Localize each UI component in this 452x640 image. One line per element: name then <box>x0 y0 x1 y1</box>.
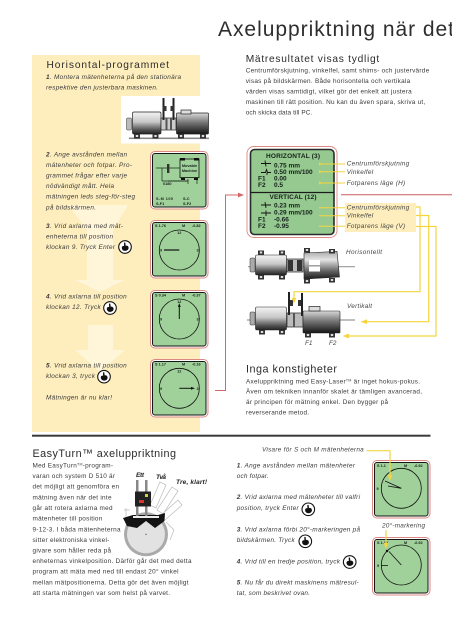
text: vertical values: 0.23 mm <box>274 203 300 210</box>
screen: EasyTurn clock with pointers <box>372 460 430 518</box>
labels: horizontal value names: Vinkelfel <box>347 169 374 176</box>
text block: Inga konstigheter: Axeluppriktning med Easy-Laser <box>246 378 346 385</box>
screen: clock position 9: 9 <box>160 248 162 252</box>
screen: EasyTurn clock with pointers: M <box>404 464 407 468</box>
text: vertical values: 0.29 mm/100 <box>274 209 313 216</box>
text block: EasyTurn body: program att mäta med ned till endast 20° vinkel <box>32 568 178 576</box>
text block: EasyTurn body <box>32 462 192 597</box>
text block: step 1 <box>46 73 181 92</box>
label: Vertikalt: Vertikalt <box>347 303 372 310</box>
icon: enter button EasyTurn step 2 <box>302 503 315 516</box>
screen: clock position 12: 9 <box>160 318 162 322</box>
text: horizontal values: 0.5 <box>274 182 283 189</box>
heading: Horisontal-programmet: Horisontal-programmet <box>46 60 169 71</box>
text block: Inga konstigheter: Även om tekniken innanför skalet är tämligen avancerad, <box>246 388 422 396</box>
text block: Mätresultatet: visas på bildskärmen. Både horisontella och vertikala <box>246 77 411 85</box>
text: horizontal values <box>258 160 313 189</box>
screen: clock position 3: M <box>182 362 185 366</box>
divider: dark rule <box>32 435 430 437</box>
labels: horizontal value names <box>347 161 410 187</box>
screen: EasyTurn clock with pointers: 9 <box>376 487 379 491</box>
screen: clock position 9: -0.82 <box>192 224 201 228</box>
arrow: yellow pointer to 20 degree mark <box>384 530 388 549</box>
label: Tre, klart!: Tre, klart! <box>176 479 208 486</box>
screen: EasyTurn clock with pointers: -6.92 <box>414 464 423 468</box>
screen: EasyTurn clock with 20 degree mark <box>372 538 430 595</box>
text: horizontal values: F1 <box>258 176 266 183</box>
text block: EasyTurn body: det möjligt att genomföra en <box>32 484 119 491</box>
text block: EasyTurn body: enheternas vinkelposition. Därför går det med detta <box>32 557 192 565</box>
text block: step 4: 4. Vrid axlarna till position <box>45 293 127 300</box>
heading: VERTICAL (12): VERTICAL (12) <box>270 194 316 201</box>
text block: step 5: klockan 3, tryck <box>46 373 96 380</box>
text block: EasyTurn body: TM <box>77 462 83 466</box>
callout: vertical value names with cream box: Vinkelfel <box>347 212 374 220</box>
screen: clock position 9: 12 <box>177 231 181 235</box>
text block: EasyTurn steps: position, tryck Enter <box>236 505 300 512</box>
text block: EasyTurn body: mellan mätpositionerna. Detta gör det även möjligt <box>32 579 189 586</box>
screen: EasyTurn clock with 20 degree mark: -6.92 <box>414 541 423 545</box>
title: Axeluppriktning när det <box>218 18 452 41</box>
arrow: yellow pointer to S and M hands <box>367 451 392 481</box>
label: Horisontellt: Horisontellt <box>346 249 382 256</box>
text: vertical values: F1 <box>258 216 266 223</box>
divider: red line right of screen <box>341 194 452 196</box>
panel: Horisontal-programmet cream background <box>32 55 200 432</box>
callout: vertical value names with cream box: Centrumförskjutning <box>347 204 410 212</box>
illustration: machine, horizontal view <box>248 248 355 284</box>
screen: clock position 3 <box>150 360 208 417</box>
screen: clock position 12 <box>150 290 208 348</box>
text block: EasyTurn body: sitter elektroniska vinkel- <box>32 537 109 544</box>
screen: Movable Machine distances <box>150 152 208 209</box>
label: F2: F2 <box>329 340 337 347</box>
text block: step 5: Mätningen är nu klar! <box>46 394 112 401</box>
icon: enter button step 4 <box>104 302 116 314</box>
screen: clock position 3: 9 <box>160 387 162 391</box>
icon: enter button step 3 <box>119 241 131 253</box>
text block: step 2: 2. Ange avstånden mellan <box>45 150 127 158</box>
text block: step 3: 3. Vrid axlarna med mät- <box>46 223 123 230</box>
text block: step 2: nödvändigt mått. Hela <box>46 182 114 190</box>
screen: EasyTurn clock with 20 degree mark: M <box>404 541 407 545</box>
screen: EasyTurn clock with 20 degree mark: 9 <box>377 564 379 568</box>
screen: clock position 3: 12 <box>177 370 181 374</box>
text block: step 1: 1. Montera mätenheterna på den stationära <box>46 73 181 81</box>
text block: EasyTurn body: mätning även när det inte <box>32 494 112 501</box>
screen: clock position 3: 3 <box>196 387 199 391</box>
text block: step 2: mätenheter och fotpar. Pro- <box>46 162 132 169</box>
text block: Inga konstigheter: är principen för mätning enkel. Den bygger på <box>246 398 388 406</box>
screen: Movable Machine distances: 0180 <box>163 182 171 186</box>
text block: step 2 <box>45 150 135 212</box>
text block: step 2: mätningen leds steg-för-steg <box>46 194 135 200</box>
screen: clock position 12: S 0.34 <box>155 294 167 298</box>
text block: EasyTurn body: -program- <box>83 462 113 469</box>
text block: step 4: klockan 12. Tryck <box>46 304 101 311</box>
screen: Movable Machine distances: S-F2 <box>183 202 191 206</box>
screen: clock position 9: M <box>182 224 185 228</box>
label: Två: Två <box>156 473 166 481</box>
text block: step 1: respektive den justerbara maskinen. <box>46 84 158 92</box>
screen: clock position 3: S 1.17 <box>155 362 166 366</box>
text: horizontal values: 0.00 <box>274 176 287 183</box>
screen: EasyTurn clock with pointers: S 1.1 <box>377 464 386 468</box>
text: vertical values: F2 <box>258 223 266 230</box>
callout: vertical value names with cream box <box>319 203 416 232</box>
text: horizontal values: F2 <box>258 182 266 189</box>
text block: step 2: på bildskärmen. <box>45 204 96 212</box>
text block: step 3: klockan 9. Tryck Enter <box>46 244 116 251</box>
label: Ett: Ett <box>136 472 145 479</box>
callout: vertical value names with cream box: Fotparens läge (V) <box>347 223 405 230</box>
heading: EasyTurn axeluppriktning: EasyTurn™ axeluppriktning <box>32 448 176 460</box>
screen: clock position 12: 12 <box>177 300 181 304</box>
text block: EasyTurn steps: 2. Vrid axlarna med mätenheter till valfri <box>236 494 361 501</box>
text block: step 3 <box>46 223 123 251</box>
text: vertical values <box>258 202 313 230</box>
illustration: machine, vertical view with yellow pointers <box>247 292 355 338</box>
text block: Mätresultatet: maskinen till rätt position. Nu kan du även spara, skriva ut, <box>246 99 425 106</box>
callout: yellow leader lines for horizontal values <box>319 162 345 185</box>
text block: Mätresultatet: och skicka data till PC. <box>246 110 312 116</box>
text block: EasyTurn steps <box>236 461 361 597</box>
text block: Mätresultatet: värden visas samtidigt, vilket gör det enkelt att justera <box>246 88 412 96</box>
arrow: yellow leaders to vertical machine <box>292 207 436 338</box>
text block: Inga konstigheter: är inget hokus-pokus. <box>352 378 420 385</box>
text block: EasyTurn body: varan och system D 510 är <box>32 473 116 480</box>
screen: clock position 12: M <box>182 294 185 298</box>
screen: Movable Machine distances: S-F1 <box>156 202 164 206</box>
text block: EasyTurn steps: 5. Nu får du direkt maskinens mätresul- <box>237 578 359 586</box>
text: vertical values: -0.66 <box>274 216 289 223</box>
text block: step 2: grammet frågar efter varje <box>46 172 127 180</box>
screen: clock position 9: S 1.76 <box>155 224 166 228</box>
text block: EasyTurn steps: 4. Vrid till en tredje position, tryck <box>236 558 341 565</box>
screen: Movable Machine distances: S-M 100 <box>156 197 173 201</box>
screen: clock position 12: 3 <box>196 318 199 322</box>
text: horizontal values: 0.75 mm <box>274 162 300 170</box>
text block: Mätresultatet: Centrumförskjutning, vinkelfel, samt shims- och justervärde <box>246 68 430 74</box>
text block: Inga konstigheter: reverserande metod. <box>246 410 309 416</box>
icon: enter button EasyTurn step 4 <box>343 556 356 568</box>
label: Visare för S och M: Visare för S och M mätenheterna <box>262 447 364 454</box>
screen: Movable Machine distances: Machine <box>182 169 197 173</box>
labels: horizontal value names: Fotparens läge (H) <box>347 180 405 187</box>
illustration: machines on white background <box>121 96 212 144</box>
text block: EasyTurn steps: bildskärmen. Tryck <box>237 537 295 544</box>
screen: clock position 12: -0.37 <box>192 294 201 298</box>
text block: EasyTurn body: Med EasyTurn <box>32 462 77 469</box>
text block: EasyTurn body: att starta mätningen var som helst på varvet. <box>32 589 170 597</box>
screen: clock position 3: -0.16 <box>192 362 201 366</box>
illustration: EasyTurn rotating shaft <box>123 480 182 556</box>
text block: EasyTurn body: går att rotera axlarna med <box>32 504 113 512</box>
arrow: red feedback line <box>215 193 244 390</box>
text block: EasyTurn body: mätenheter till position <box>32 516 103 523</box>
screen: HORIZONTAL and VERTICAL results <box>247 146 337 238</box>
text block: step 4 <box>45 293 127 311</box>
heading: HORIZONTAL (3): HORIZONTAL (3) <box>266 153 320 160</box>
label: 20-markering: 20°-markering <box>381 521 425 529</box>
text block: step 5 <box>46 362 127 401</box>
text block: Mätresultatet <box>246 68 430 116</box>
screen: Movable Machine distances: S-C <box>183 197 190 201</box>
heading: Mätresultatet visas tydligt: Mätresultatet visas tydligt <box>246 54 379 65</box>
text block: EasyTurn steps: tat, som beskrivet ovan. <box>237 590 310 597</box>
icon: enter button EasyTurn step 3 <box>299 535 312 548</box>
screen: clock position 9 <box>150 220 208 278</box>
screen: Movable Machine distances: Movable <box>182 164 197 168</box>
text block: step 5: 5. Vrid axlarna till position <box>46 362 127 369</box>
text: vertical values: -0.95 <box>274 223 289 230</box>
icon: enter button step 5 <box>98 370 110 383</box>
text block: EasyTurn steps: och fotpar. <box>237 473 269 480</box>
label: F1: F1 <box>305 340 313 347</box>
text block: step 3: enheterna till position <box>46 234 113 240</box>
text block: Inga konstigheter: TM <box>346 378 351 382</box>
text block: EasyTurn steps: 3. Vrid axlarna förbi 20°-markeringen på <box>237 525 360 533</box>
text block: EasyTurn body: 9-12-3. I båda mätenheterna <box>32 525 121 533</box>
screen: clock position 9: 3 <box>196 248 199 252</box>
screen: EasyTurn clock with 20 degree mark: S 1.10 <box>377 541 388 545</box>
text block: Inga konstigheter <box>246 378 422 416</box>
heading: Inga konstigheter: Inga konstigheter <box>246 364 337 376</box>
text block: EasyTurn body: givare som håller reda på <box>32 546 111 554</box>
text block: EasyTurn steps: 1. Ange avstånden mellan mätenheter <box>237 461 356 469</box>
labels: horizontal value names: Centrumförskjutning <box>347 161 410 168</box>
text: horizontal values: 0.50 mm/100 <box>274 169 313 176</box>
